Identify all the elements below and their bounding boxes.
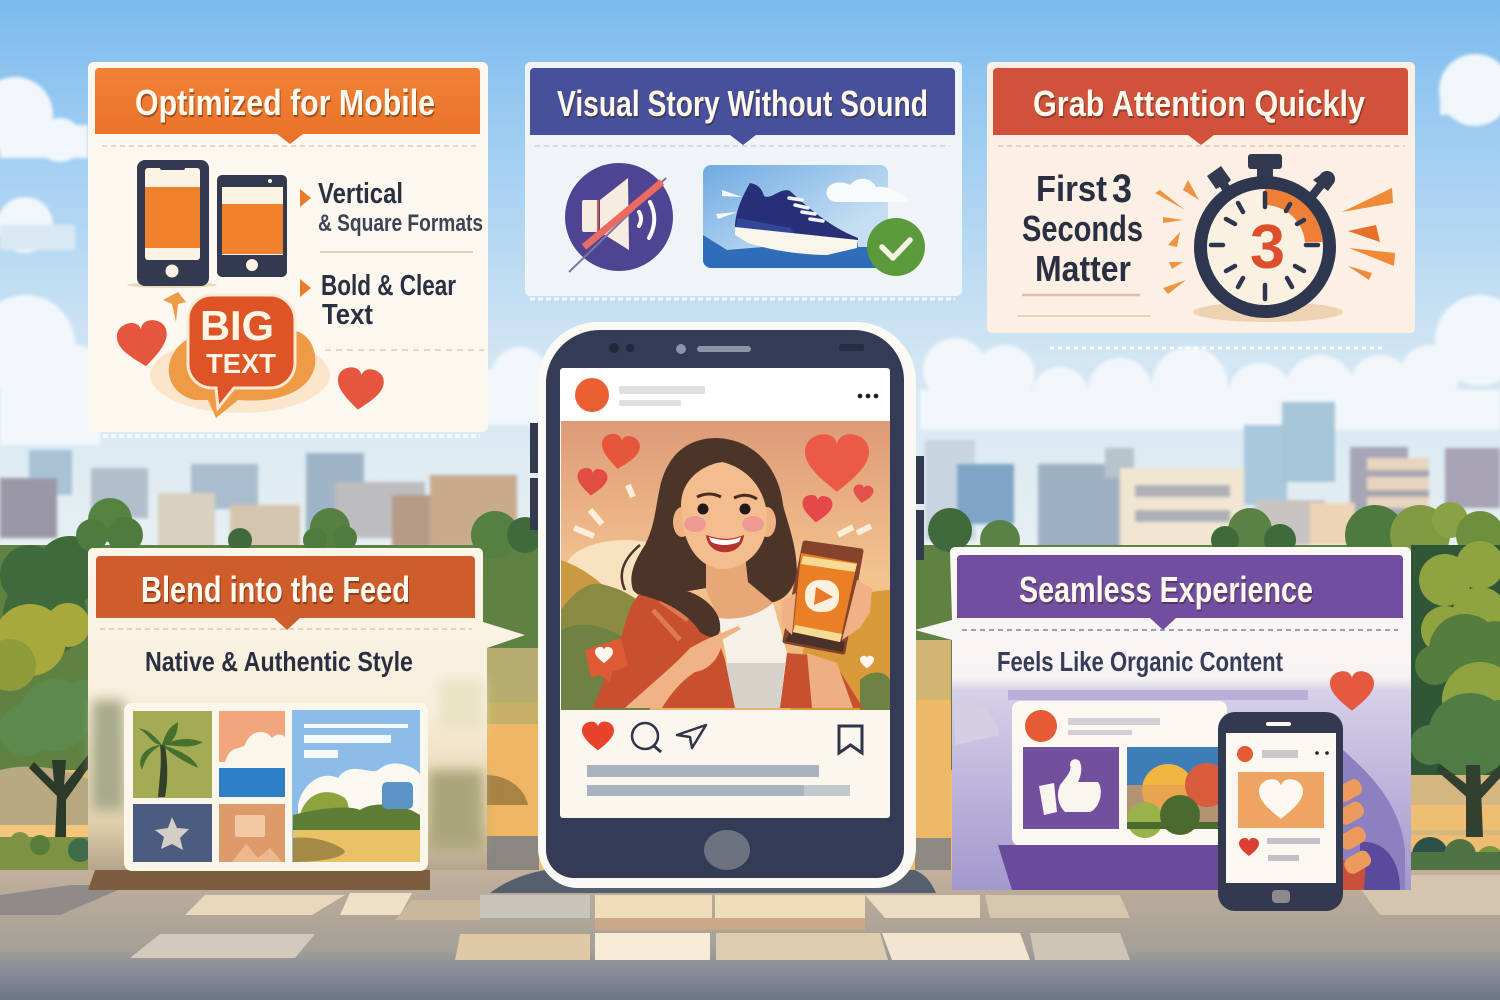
icon: stopwatch: 3: [1250, 213, 1285, 282]
tile: navy star: [133, 804, 212, 862]
post image with woman: [561, 421, 890, 710]
heading: visual story without sound: Visual Story Without Sound: [557, 83, 928, 124]
text: first 3 seconds matter: 3: [1112, 167, 1132, 211]
text: vertical and square formats: & Square Formats: [318, 210, 483, 237]
text: bold and clear text: [300, 270, 456, 331]
ground fields: [0, 545, 1500, 875]
home button: [704, 830, 750, 870]
icon: muted speaker: [565, 163, 673, 272]
text: first 3 seconds matter: Matter: [1035, 248, 1131, 289]
sparkles: [574, 485, 871, 536]
caption lines: [587, 765, 850, 796]
pointing arm: [625, 626, 741, 708]
heading: seamless experience: Seamless Experience: [1019, 569, 1313, 610]
small white heart: [860, 656, 874, 668]
cardigan: [593, 590, 863, 708]
hair lock: [640, 570, 720, 637]
panel: seamless experience: [915, 547, 1411, 911]
heading: visual story without sound: [530, 68, 955, 145]
like badge: [585, 638, 628, 682]
tile: peach with cloud: [219, 711, 285, 797]
side buttons: [530, 423, 924, 560]
white t-shirt: [718, 603, 787, 708]
heading: seamless experience: [957, 555, 1403, 630]
right forearm: [807, 653, 853, 708]
heading: optimized for mobile: Optimized for Mobile: [135, 82, 435, 123]
text: native and authentic style: Native & Authentic Style: [145, 646, 413, 677]
tile: palm: [133, 711, 212, 798]
city skyline: [0, 402, 1500, 550]
icon: green check: [867, 218, 925, 276]
icon: heart: [1330, 671, 1374, 711]
icon: big text speech bubble: [150, 292, 330, 418]
text: vertical and square formats: Vertical: [318, 178, 403, 210]
panel: grab attention quickly: [987, 62, 1415, 333]
heading: grab attention quickly: Grab Attention Quickly: [1033, 83, 1365, 124]
text: bold and clear text: Bold & Clear: [321, 270, 456, 302]
post screen: [560, 368, 890, 818]
heading: grab attention quickly: [993, 68, 1408, 145]
text: bold and clear text: Text: [322, 299, 373, 331]
hair: [631, 438, 797, 603]
panel: blend into the feed: [88, 548, 525, 890]
text: feels like organic content: Feels Like Organic Content: [997, 646, 1283, 677]
heading: optimized for mobile: [95, 68, 480, 144]
icon: two phones: [127, 160, 287, 288]
tile: sunset landscape: [1127, 747, 1229, 838]
text: first 3 seconds matter: Seconds: [1022, 208, 1143, 249]
heading: blend into the feed: [96, 556, 475, 630]
hearts: [576, 432, 874, 524]
tile: tan chat: [219, 804, 285, 862]
pavement: [0, 870, 1500, 1000]
clouds: [0, 54, 1500, 445]
neck and chest: [706, 555, 773, 619]
phone with hand: [1218, 712, 1374, 911]
tile: landscape ad: [292, 710, 420, 862]
collage card: [124, 703, 428, 871]
icon: big text speech bubble: BIG: [200, 302, 274, 349]
icon: heart left: [115, 318, 171, 370]
tile: thumbs up: [1023, 747, 1119, 829]
heading: blend into the feed: Blend into the Feed: [141, 569, 410, 610]
text: first 3 seconds matter: [1018, 167, 1150, 316]
text: first 3 seconds matter: First: [1036, 168, 1107, 209]
text: vertical and square formats: [300, 178, 483, 237]
icon: shoe card: [703, 165, 925, 276]
icon: heart right: [335, 366, 385, 412]
icon: stopwatch: [1155, 154, 1395, 322]
face: [673, 462, 776, 569]
laptop base: [998, 845, 1225, 890]
card shadow: [88, 870, 430, 890]
panel: visual story without sound: [525, 62, 962, 299]
action icons: [582, 722, 862, 753]
trees: [0, 498, 1500, 874]
laptop feed: [1008, 690, 1308, 846]
panel: optimized for mobile: [88, 62, 488, 436]
small phone: [782, 543, 872, 652]
central phone mockup: [530, 322, 924, 888]
icon: big text speech bubble: TEXT: [206, 348, 276, 379]
